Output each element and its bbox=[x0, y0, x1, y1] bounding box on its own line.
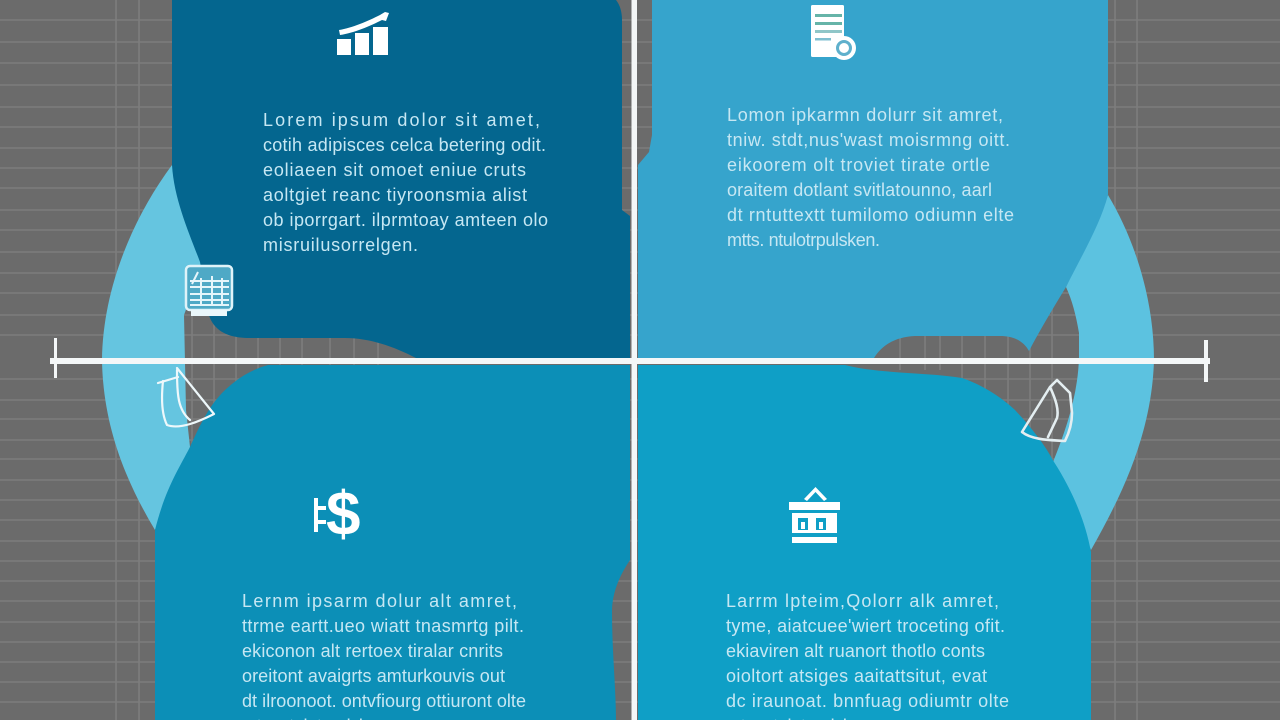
right light blue crescent bbox=[1053, 195, 1154, 550]
icon: table panel bbox=[186, 266, 232, 316]
text block: top right: tniw. stdt,nus'wast moisrmng oitt. bbox=[727, 130, 1010, 150]
text block: bottom left bbox=[242, 591, 526, 720]
text block: bottom right: Larrm lpteim,Qolorr alk amret, bbox=[726, 591, 999, 611]
left light blue crescent bbox=[102, 165, 205, 530]
text block: bottom left: oreitont avaigrts amturkouvis out bbox=[242, 666, 505, 686]
text block: top right: Lomon ipkarmn dolurr sit amret, bbox=[727, 105, 1003, 125]
text block: top right bbox=[727, 105, 1014, 250]
text block: top left: misruilusorrelgen. bbox=[263, 235, 418, 255]
icon: dollar sign: $ bbox=[326, 480, 360, 549]
text block: top right: oraitem dotlant svitlatounno, aarl bbox=[727, 180, 992, 200]
text block: bottom right: oioltort atsiges aaitattsitut, evat bbox=[726, 666, 987, 686]
text block: top left: aoltgiet reanc tiyroonsmia alist bbox=[263, 185, 527, 205]
text block: bottom right: dc iraunoat. bnnfuag odiumtr olte bbox=[726, 691, 1009, 711]
text block: bottom left: ttrme eartt.ueo wiatt tnasmrtg pilt. bbox=[242, 616, 524, 636]
text block: top left: ob iporrgart. ilprmtoay amteen olo bbox=[263, 210, 548, 230]
axis: vertical white line bbox=[632, 0, 637, 720]
icon: outline bag right bbox=[1022, 380, 1072, 441]
icon: basket box bbox=[789, 487, 840, 543]
icon: document with coin bbox=[811, 5, 856, 60]
text block: bottom right bbox=[726, 591, 1009, 720]
panel: bottom left bbox=[155, 365, 630, 720]
panel: top left bbox=[172, 0, 630, 358]
text block: top right: dt rntuttextt tumilomo odiumn elte bbox=[727, 205, 1014, 225]
text block: bottom left: Lernm ipsarm dolur alt amret, bbox=[242, 591, 517, 611]
text block: top left: cotih adipisces celca betering odit. bbox=[263, 135, 546, 155]
text block: bottom left: dt ilroonoot. ontvfiourg ottiuront olte bbox=[242, 691, 526, 711]
text block: bottom right: tyme, aiatcuee'wiert troceting ofit. bbox=[726, 616, 1005, 636]
panel: top right bbox=[638, 0, 1108, 358]
text block: bottom left: ekiconon alt rertoex tiralar cnrits bbox=[242, 641, 503, 661]
text block: top right: mtts. ntulotrpulsken. bbox=[727, 230, 880, 250]
icon: bar chart bbox=[337, 12, 389, 55]
text block: top right: eikoorem olt troviet tirate ortle bbox=[727, 155, 990, 175]
text block: top left bbox=[263, 110, 548, 255]
icon: outline bag left bbox=[158, 368, 214, 426]
text block: top left: Lorem ipsum dolor sit amet, bbox=[263, 110, 540, 130]
text block: bottom right: ekiaviren alt ruanort thotlo conts bbox=[726, 641, 985, 661]
axis: horizontal white line with end ticks bbox=[50, 338, 1210, 382]
panel: bottom right bbox=[638, 365, 1091, 720]
text block: top left: eoliaeen sit omoet eniue cruts bbox=[263, 160, 526, 180]
